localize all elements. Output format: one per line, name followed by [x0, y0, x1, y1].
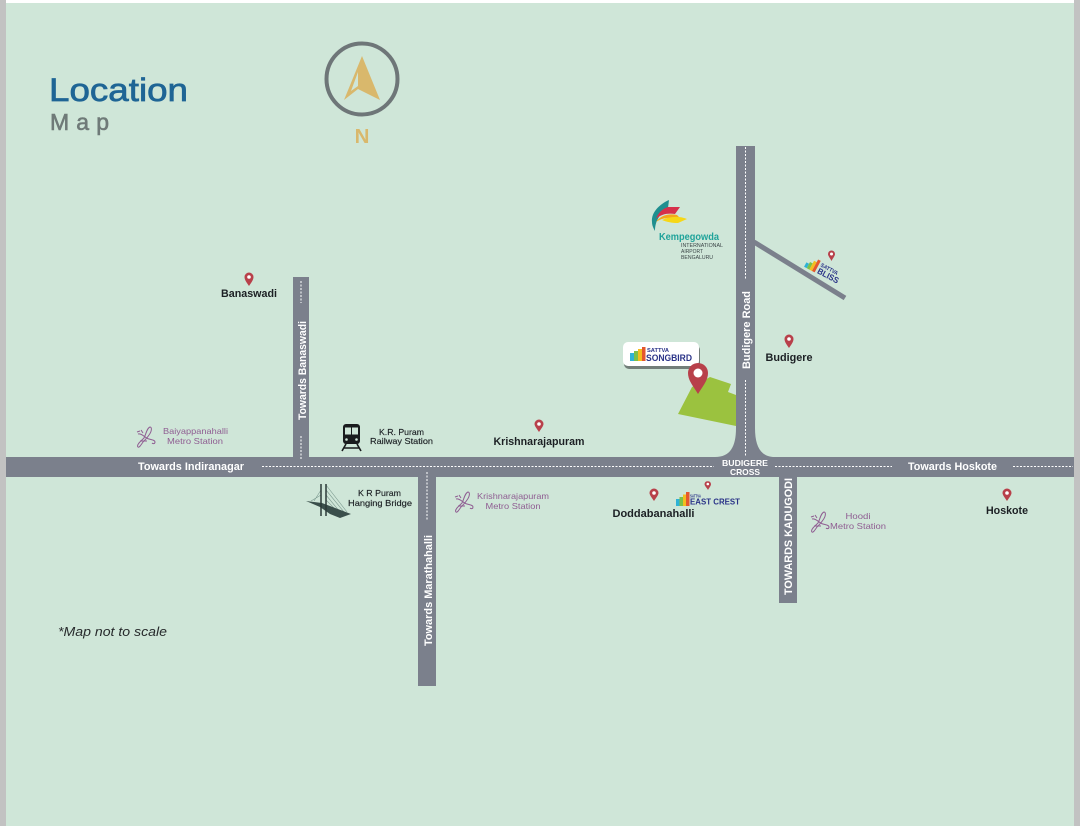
logo: Kempegowda airport: Kempegowda: [659, 231, 719, 243]
road: Towards Kadugodi: [779, 476, 797, 603]
road labels: CROSS: [730, 467, 760, 477]
title: [49, 72, 188, 135]
logo: Sattva East Crest: EAST CREST: [690, 496, 741, 506]
place: Hoskote: [986, 488, 1028, 517]
icon: metro Krishnarajapuram: [455, 492, 473, 512]
logo: Kempegowda airport: INTERNATIONAL: [681, 243, 723, 249]
road labels: Towards Hoskote: [908, 461, 997, 473]
road labels: Towards Indiranagar: [138, 461, 245, 473]
title: Map: [50, 109, 109, 135]
logo: Kempegowda airport: [652, 200, 723, 261]
roads: [6, 146, 1074, 686]
note: map not to scale: *Map not to scale: [58, 624, 167, 639]
title: Location: [49, 72, 188, 108]
road labels: TOWARDS KADUGODI: [783, 478, 795, 595]
label: Krishnarajapuram Metro Station: [477, 491, 549, 511]
icon: Sattva Bliss pin: [828, 251, 835, 261]
label: Hoodi Metro Station: [830, 511, 886, 531]
road: main east-west: [6, 457, 1074, 477]
road: Towards Marathahalli: [418, 476, 436, 686]
logo: Sattva East Crest: [676, 481, 741, 506]
road labels: Towards Marathahalli: [423, 535, 435, 646]
place: Banaswadi: [221, 272, 277, 300]
label: Hoodi Metro Station: Hoodi: [846, 511, 871, 521]
label: Krishnarajapuram Metro Station: Metro Station: [486, 501, 541, 511]
place: Krishnarajapuram: [494, 420, 585, 448]
road: branch to Sattva Bliss: [754, 242, 845, 298]
logo: Sattva Bliss: SATTVA: [819, 263, 839, 277]
logo: Kempegowda airport: AIRPORT: [681, 249, 704, 255]
label: K R Puram Hanging Bridge: Hanging Bridge: [348, 498, 412, 508]
label: K.R. Puram Railway Station: K.R. Puram: [379, 427, 424, 437]
place: Doddabanahalli: Doddabanahalli: [612, 508, 694, 520]
label: Krishnarajapuram Metro Station: Krishnarajapuram: [477, 491, 549, 501]
place: Hoskote: Hoskote: [986, 505, 1028, 517]
label: K.R. Puram Railway Station: [370, 427, 433, 446]
road labels: BUDIGERE: [722, 458, 768, 468]
road labels: Budigere Road: [741, 291, 753, 369]
icon: metro Baiyappanahalli: [137, 427, 155, 447]
label: K R Puram Hanging Bridge: K R Puram: [358, 488, 401, 498]
road: Towards Banaswadi: [293, 277, 309, 458]
logo: Sattva East Crest: SATTVA: [690, 494, 701, 498]
label: Baiyappanahalli Metro Station: Metro Station: [167, 436, 223, 446]
label: Hoodi Metro Station: Metro Station: [830, 521, 886, 531]
road: Budigere Road: [736, 146, 755, 458]
icon: hanging bridge: [306, 484, 351, 518]
icon: project pin: [688, 363, 708, 394]
callout: Sattva Songbird: SONGBIRD: [646, 353, 692, 364]
label: K R Puram Hanging Bridge: [348, 488, 412, 508]
icon: train: [342, 424, 361, 451]
road labels: [138, 291, 997, 646]
place: Banaswadi: Banaswadi: [221, 288, 277, 300]
road labels: Towards Banaswadi: [297, 321, 309, 420]
label: K.R. Puram Railway Station: Railway Station: [370, 436, 433, 446]
label: Baiyappanahalli Metro Station: Baiyappanahalli: [163, 426, 228, 436]
place: Budigere: [766, 334, 812, 364]
icon: north compass: [326, 44, 398, 148]
callout: Sattva Songbird: [623, 342, 700, 369]
icon: metro Hoodi: [811, 512, 829, 532]
label: Baiyappanahalli Metro Station: [163, 426, 228, 446]
callout: Sattva Songbird: SATTVA: [647, 348, 669, 354]
place: Doddabanahalli: [612, 488, 694, 520]
road centre dashes: [262, 147, 1073, 520]
logo: Sattva Bliss: BLISS: [816, 266, 841, 286]
place: Budigere: Budigere: [766, 352, 812, 364]
place: Krishnarajapuram: Krishnarajapuram: [494, 436, 585, 448]
road: Budigere junction flare: [715, 428, 775, 457]
icon: north compass: N: [355, 125, 369, 148]
project plot: [678, 377, 736, 426]
logo: Sattva Bliss: [803, 255, 843, 286]
logo: Kempegowda airport: BENGALURU: [681, 255, 713, 261]
